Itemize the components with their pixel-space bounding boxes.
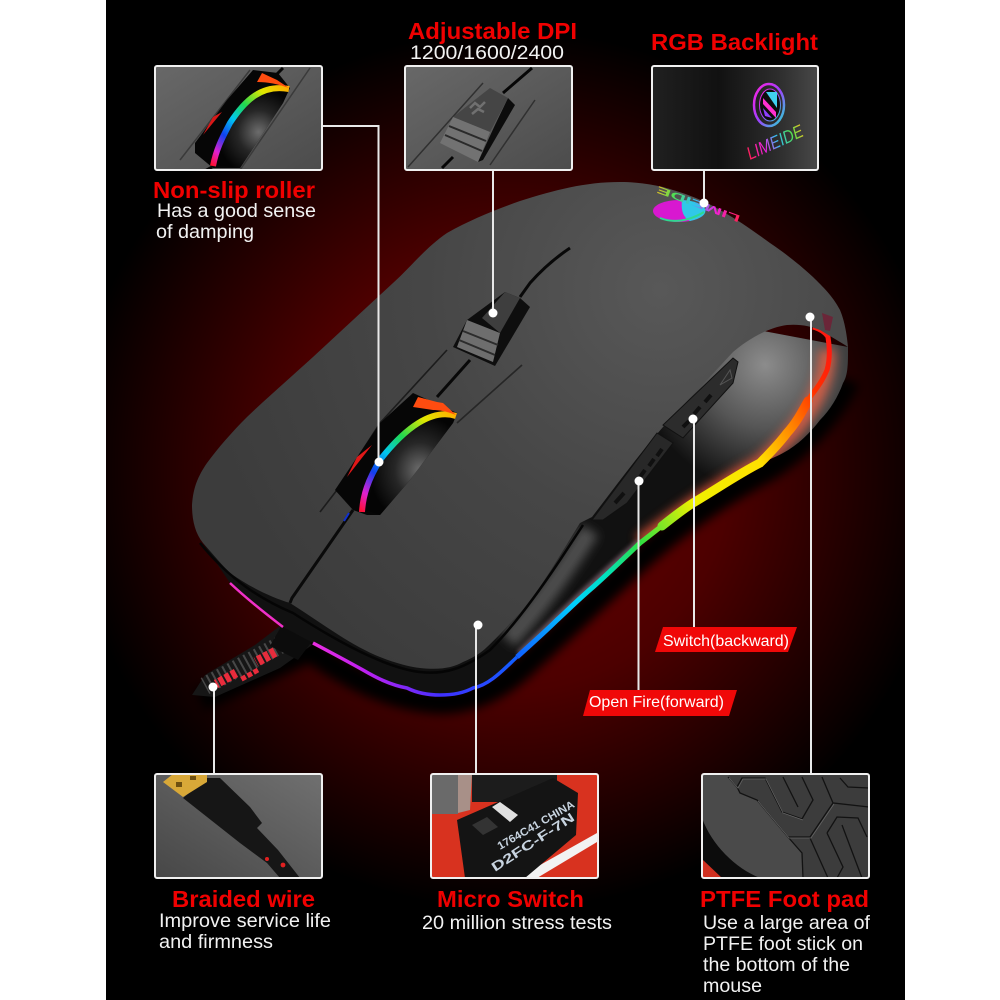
callout: PTFE Foot pad xyxy=(700,886,871,997)
callout: PTFE Foot pad: Use a large area of xyxy=(703,912,871,934)
callout: Micro Switch: 20 million stress tests xyxy=(422,912,612,934)
thumbnail: micro switch xyxy=(431,774,598,878)
scroll wheel xyxy=(335,393,457,521)
callout: PTFE Foot pad: PTFE Foot pad xyxy=(700,886,869,912)
thumbnail: non-slip roller xyxy=(155,66,322,172)
mouse illustration xyxy=(192,182,850,702)
top shell of mouse xyxy=(192,182,848,669)
callout: Micro Switch xyxy=(422,886,612,934)
logo on mouse shell: LIMEIDE xyxy=(655,183,742,224)
callout: Braided wire: Improve service life xyxy=(159,910,331,932)
callout: Non-slip roller: Has a good sense xyxy=(157,200,316,222)
black panel with red glow xyxy=(106,0,905,1000)
leader lines and dots xyxy=(208,126,814,774)
heading: RGB Backlight: RGB Backlight xyxy=(651,29,818,55)
label: Open Fire(forward): Open Fire(forward) xyxy=(589,694,724,711)
callout: Non-slip roller: of damping xyxy=(156,221,254,243)
shadow below the mouse edge xyxy=(200,380,848,702)
callout: PTFE Foot pad: mouse xyxy=(703,975,762,997)
thumbnail: RGB backlight logo: LIMEIDE xyxy=(743,121,807,164)
callout: Micro Switch: Micro Switch xyxy=(437,886,584,912)
thumbnail: micro switch: 1764C41 CHINA xyxy=(496,799,577,853)
side buttons xyxy=(592,358,738,520)
callout: Non-slip roller xyxy=(153,177,316,243)
callout: Adjustable DPI xyxy=(408,18,577,64)
label: Switch(backward) xyxy=(655,627,797,652)
RGB light strip xyxy=(230,327,829,695)
callout: Adjustable DPI: 1200/1600/2400 xyxy=(410,42,564,64)
DPI button xyxy=(453,292,530,366)
label: Open Fire(forward) xyxy=(583,690,737,716)
callout: Braided wire: Braided wire xyxy=(172,886,315,912)
callout: PTFE Foot pad: the bottom of the xyxy=(703,954,850,976)
thumbnail: micro switch: D2FC-F-7N xyxy=(488,810,577,875)
logo on mouse shell xyxy=(653,183,742,224)
thumbnail: adjustable DPI xyxy=(405,66,572,170)
thumbnail: PTFE foot pad xyxy=(702,774,869,878)
callout: Non-slip roller: Non-slip roller xyxy=(153,177,315,203)
callout: Adjustable DPI: Adjustable DPI xyxy=(408,18,577,44)
rear corner accent xyxy=(822,313,833,331)
callout: Braided wire xyxy=(159,886,331,953)
braided cable xyxy=(192,622,313,697)
label: Switch(backward): Switch(backward) xyxy=(663,633,789,650)
lower shell of mouse xyxy=(204,331,848,694)
thumbnail: RGB backlight logo xyxy=(652,66,818,170)
callout: Braided wire: and firmness xyxy=(159,931,273,953)
icon: logo ring xyxy=(754,84,784,126)
callout: PTFE Foot pad: PTFE foot stick on xyxy=(703,933,863,955)
button seams and grooves xyxy=(200,248,583,673)
thumbnail: USB braided wire xyxy=(155,774,322,878)
